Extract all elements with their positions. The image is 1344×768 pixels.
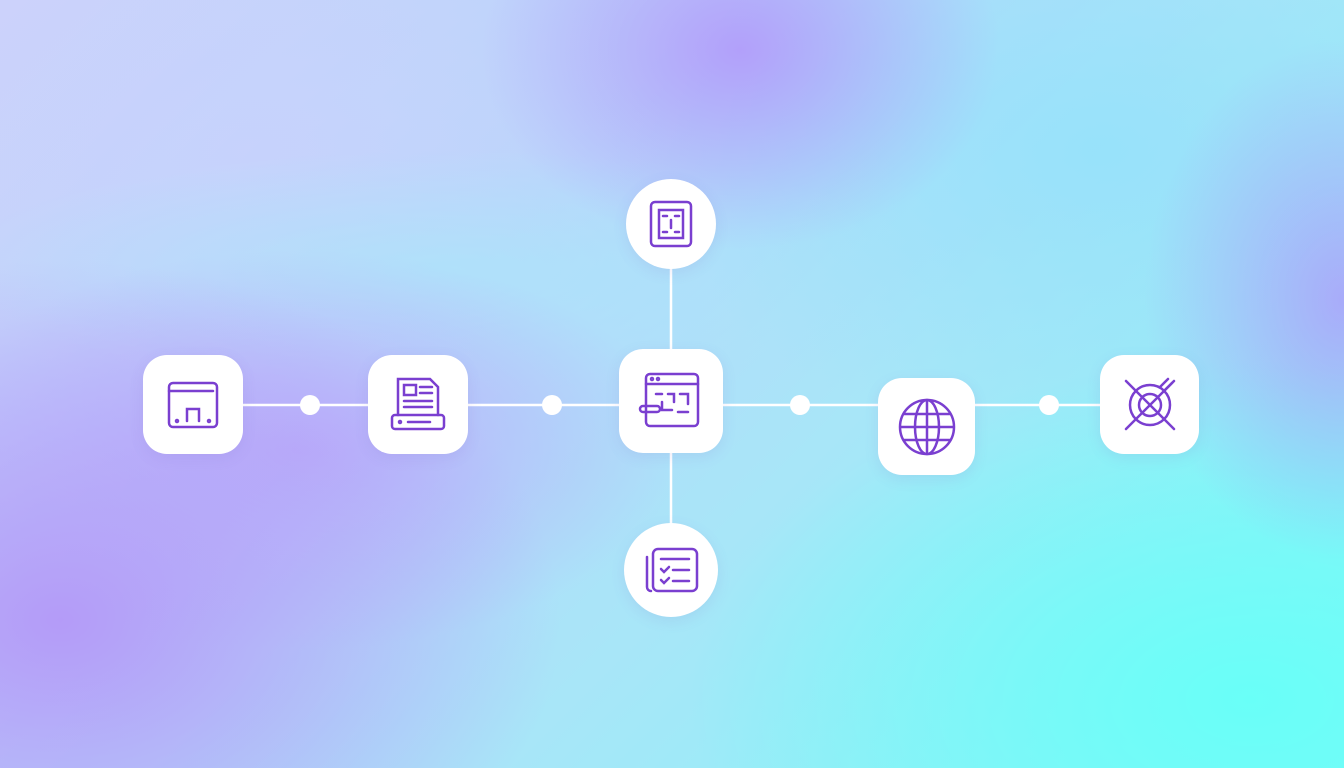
node: top circle chip icon <box>626 179 716 269</box>
dot 4 <box>1039 395 1059 415</box>
node: center workflow icon <box>619 349 723 453</box>
node: target icon <box>1100 355 1199 454</box>
node: bottom circle checklist icon <box>624 523 718 617</box>
dot 3 <box>790 395 810 415</box>
node: folder icon <box>143 355 243 454</box>
node: globe icon <box>878 378 975 475</box>
dot 1 <box>300 395 320 415</box>
dot 2 <box>542 395 562 415</box>
node: document icon <box>368 355 468 454</box>
